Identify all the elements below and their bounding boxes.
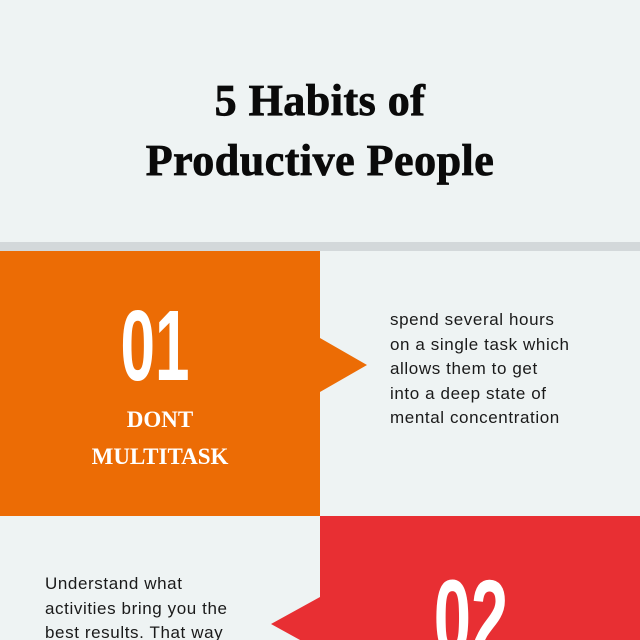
panel: habit 02: [271, 516, 640, 640]
title: Productive People: [146, 136, 494, 185]
orange block: [0, 251, 367, 516]
text: habit 02 description: Understand what: [45, 574, 183, 593]
number 01: 01: [121, 290, 189, 402]
text: habit 01 description: allows them to get: [390, 359, 538, 378]
red block: [271, 516, 640, 640]
text: habit 01 description: on a single task which: [390, 334, 570, 354]
heading: dont multitask: DONT: [127, 407, 193, 432]
text: habit 01 description: into a deep state of: [390, 384, 547, 402]
panel: habit 01: [0, 251, 367, 516]
text: habit 02 description: [45, 574, 228, 640]
text: habit 01 description: mental concentration: [390, 408, 560, 427]
text: habit 02 description: activities bring you the: [45, 598, 228, 618]
text: habit 01 description: [390, 310, 570, 427]
text: habit 01 description: spend several hours: [390, 310, 554, 329]
title: [146, 76, 494, 185]
heading: dont multitask: MULTITASK: [92, 444, 228, 469]
gray band: [0, 242, 640, 251]
heading: dont multitask: [92, 407, 228, 469]
title: 5 Habits of: [215, 76, 425, 125]
